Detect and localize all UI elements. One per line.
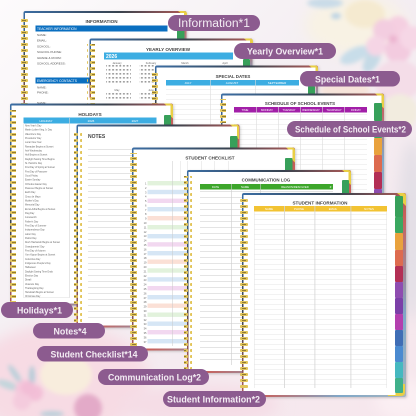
label: Student Checklist: Student Checklist*14	[50, 350, 138, 360]
label: Holidays: Holidays*1	[17, 306, 63, 316]
holiday list: Holi Begins at Sunset	[25, 154, 48, 157]
heading: STUDENT CHECKLIST	[185, 156, 235, 160]
weekly table: TIME	[242, 108, 248, 112]
year banner	[104, 52, 233, 60]
spiral coil	[184, 176, 192, 374]
column header bar: JULY	[184, 81, 192, 85]
page: schedule of school events	[218, 94, 384, 204]
holiday list: Flag Day	[25, 213, 35, 215]
holiday list: Election Day	[25, 274, 39, 278]
heading: COMMUNICATION LOG	[242, 178, 291, 182]
ruled lines	[88, 145, 148, 323]
teacher information section: SCHOOL:	[37, 44, 51, 48]
teacher information section: SCHOOL ADDRESS:	[37, 62, 66, 66]
holiday list: Grandparents' Day	[25, 245, 45, 248]
row numbers: 28	[144, 300, 147, 304]
log table: DATE	[212, 185, 219, 189]
flowers bottom left	[0, 355, 102, 416]
emergency contacts section: EMERGENCY CONTACTS	[37, 79, 78, 83]
log table: NAME	[241, 185, 249, 189]
spiral coil	[218, 99, 226, 123]
holiday list: Independence Day	[25, 230, 45, 232]
weekly table: MONDAY	[261, 108, 273, 112]
row numbers: 3	[145, 190, 147, 194]
row numbers: 17	[144, 252, 147, 256]
label: Communication Log	[98, 369, 209, 385]
teacher information section: NAME:	[37, 33, 47, 37]
holiday list: Columbus Day	[25, 259, 41, 261]
row numbers: 7	[145, 208, 147, 212]
label: Special Dates	[300, 71, 400, 86]
holiday list: Valentine's Day	[25, 133, 42, 136]
page: student information	[240, 193, 406, 397]
row numbers: 21	[144, 269, 147, 273]
row numbers: 14	[144, 239, 147, 243]
month tabs	[374, 103, 382, 204]
student table: NOTES	[364, 207, 374, 211]
label: Information: Information*1	[178, 18, 250, 30]
holiday list: Diwali	[25, 280, 32, 282]
row numbers: 25	[144, 287, 147, 291]
label: Student Checklist	[37, 346, 148, 362]
heading: SPECIAL DATES	[216, 74, 250, 79]
spiral coil	[74, 130, 82, 328]
student table: PHONE	[294, 207, 304, 211]
holiday list: Earth Day	[25, 191, 36, 194]
page: student checklist	[129, 148, 295, 351]
holidays table header: HOLIDAY	[40, 119, 52, 123]
weekly table: FRIDAY	[351, 108, 361, 112]
label: Yearly Overview: Yearly Overview*1	[247, 46, 324, 58]
row numbers: 10	[144, 221, 147, 225]
holiday list: Juneteenth	[25, 216, 37, 219]
holiday list: Daylight Saving Time Ends	[25, 270, 54, 273]
holiday list: Thanksgiving Day	[25, 288, 44, 290]
mini calendars: April	[222, 61, 228, 65]
label: Student Information: Student Information*2	[167, 394, 260, 406]
emergency contacts section: PHONE:	[37, 90, 49, 94]
teacher information section: TEACHER INFORMATION	[37, 27, 77, 31]
emergency contacts section: NAME:	[37, 86, 47, 90]
label: Student Information	[163, 391, 266, 407]
holiday list: Lunar New Year	[25, 141, 42, 144]
row numbers: 23	[144, 278, 147, 282]
row numbers: 6	[145, 203, 147, 207]
row numbers: 22	[144, 274, 147, 278]
holiday list: Hanukkah Begins at Sunset	[25, 291, 54, 294]
row numbers: 8	[145, 212, 147, 216]
heading: HOLIDAYS	[78, 112, 102, 117]
row numbers: 26	[144, 291, 147, 295]
holiday list: Mother's Day	[25, 200, 39, 202]
student table: NAME	[265, 207, 273, 211]
spiral coil	[21, 17, 29, 105]
spiral coil	[87, 44, 95, 104]
row numbers: 12	[144, 230, 147, 234]
flowers top right	[307, 0, 416, 130]
holiday list: Easter Sunday	[25, 179, 41, 182]
label: Information	[168, 15, 260, 31]
log table	[200, 184, 333, 365]
spiral coil	[8, 110, 16, 302]
mini calendars: June	[148, 88, 154, 92]
label: Notes	[33, 323, 105, 338]
holiday list: First Day of Spring at Sunset	[25, 166, 55, 169]
holiday list: Patriot Day	[25, 237, 37, 240]
weekly table	[234, 107, 367, 204]
row numbers	[144, 182, 147, 344]
holiday list	[25, 124, 60, 298]
holiday list: Halloween	[25, 267, 37, 269]
row numbers: 30	[144, 309, 147, 313]
row numbers: 4	[145, 195, 147, 199]
holiday list: Eid al-Adha Begins at Sunset	[25, 208, 56, 211]
heading: NOTES	[88, 134, 106, 140]
row numbers: 2	[145, 186, 147, 190]
column header bar: AUGUST	[226, 81, 238, 85]
row numbers: 20	[144, 265, 147, 269]
spiral coil	[129, 153, 137, 351]
holiday list: New Year's Day	[25, 124, 42, 128]
holiday list: Memorial Day	[25, 204, 40, 207]
holiday list: First Day of Summer	[25, 224, 47, 228]
checklist stripes	[148, 161, 228, 346]
row numbers: 16	[144, 247, 147, 251]
mini calendars: March	[181, 61, 189, 65]
row numbers: 24	[144, 283, 147, 287]
weekly table: TUESDAY	[282, 108, 296, 112]
weekly table: WEDNESDAY	[302, 108, 320, 112]
label: Notes: Notes*4	[54, 326, 87, 338]
heading: YEARLY OVERVIEW	[146, 47, 191, 52]
mini calendars: May	[115, 88, 120, 92]
label: Schedule of School Events	[287, 121, 412, 137]
log table: REASON/RESOLVED	[281, 185, 309, 189]
emergency contacts section: NAME:	[37, 101, 47, 105]
row numbers: 27	[144, 296, 147, 300]
teacher information section: GRADE & ROOM:	[37, 56, 62, 60]
page: holidays	[8, 104, 173, 306]
page: information	[21, 11, 187, 107]
emergency contacts section	[36, 78, 96, 105]
holiday list: St. Patrick's Day	[25, 162, 43, 165]
holiday list: Martin Luther King Jr. Day	[25, 129, 53, 132]
row numbers: 29	[144, 305, 147, 309]
holiday list: Veterans Day	[25, 283, 40, 286]
holidays table header: 2027	[132, 119, 139, 123]
holiday list: Ramadan Begins at Sunset	[25, 145, 54, 148]
row numbers: 13	[144, 234, 147, 238]
page: special dates	[152, 66, 318, 128]
holiday list: Passover Begins at Sunset	[25, 187, 53, 190]
row numbers: 37	[144, 340, 147, 344]
page: communication log	[184, 170, 351, 374]
column header bar: SEPTEMBER	[268, 81, 287, 85]
page: yearly overview	[87, 38, 253, 104]
student table: EMAIL	[329, 207, 338, 211]
row numbers: 31	[144, 313, 147, 317]
holidays table header: 2026	[88, 119, 95, 123]
mini calendars	[106, 61, 228, 100]
log table: #	[330, 185, 332, 189]
heading: SCHEDULE OF SCHOOL EVENTS	[265, 101, 335, 106]
holiday list: Orthodox Easter Day	[25, 183, 48, 186]
row numbers: 11	[144, 225, 147, 229]
holiday list: Ash Wednesday	[25, 150, 43, 152]
mini calendars: January	[112, 61, 122, 65]
holiday list: First Day of Passover	[25, 170, 47, 173]
row numbers: 33	[144, 322, 147, 326]
heading: STUDENT INFORMATION	[292, 200, 348, 206]
row numbers: 35	[144, 331, 147, 335]
holiday list: Daylight Saving Time Begins	[25, 158, 55, 161]
row numbers: 9	[145, 217, 147, 221]
year banner: 2026	[106, 54, 117, 60]
holiday list: Christmas Day	[25, 295, 41, 298]
row numbers: 19	[144, 261, 147, 265]
spiral coil	[240, 198, 248, 384]
label: Yearly Overview	[234, 43, 336, 59]
spiral coil	[152, 70, 160, 128]
holiday list: First Day of Autumn	[25, 250, 46, 252]
teacher information section: EMAIL:	[37, 38, 47, 42]
row numbers: 15	[144, 243, 147, 247]
column header bar	[166, 80, 299, 128]
holiday list: Yom Kippur Begins at Sunset	[25, 254, 56, 257]
student table	[254, 206, 387, 388]
holiday list: Father's Day	[25, 220, 39, 223]
holiday list: Labor Day	[25, 233, 37, 236]
holiday list: Presidents' Day	[25, 137, 42, 140]
holiday list: Cinco de Mayo	[25, 196, 41, 198]
tab	[177, 30, 184, 48]
label: Communication Log: Communication Log*2	[108, 372, 201, 384]
row numbers: 1	[145, 182, 147, 186]
holiday list: Good Friday	[25, 174, 39, 178]
row numbers: 36	[144, 335, 147, 339]
page: notes	[74, 124, 240, 328]
holidays table header	[24, 118, 156, 298]
row numbers: 18	[144, 256, 147, 260]
teacher information section: SCHOOL PHONE:	[37, 50, 62, 54]
heading: INFORMATION	[85, 19, 118, 24]
row numbers: 5	[145, 199, 147, 203]
teacher information section	[36, 26, 168, 66]
holiday list: Rosh Hashanah Begins at Sunset	[25, 241, 60, 244]
mini calendars: February	[146, 61, 157, 65]
row numbers: 34	[144, 327, 147, 331]
holiday list: Indigenous People's Day	[25, 263, 52, 265]
month tabs	[395, 196, 403, 393]
label: Special Dates: Special Dates*1	[315, 74, 381, 86]
row numbers: 32	[144, 318, 147, 322]
weekly table: THURSDAY	[326, 108, 342, 112]
label: Holidays	[1, 302, 73, 318]
